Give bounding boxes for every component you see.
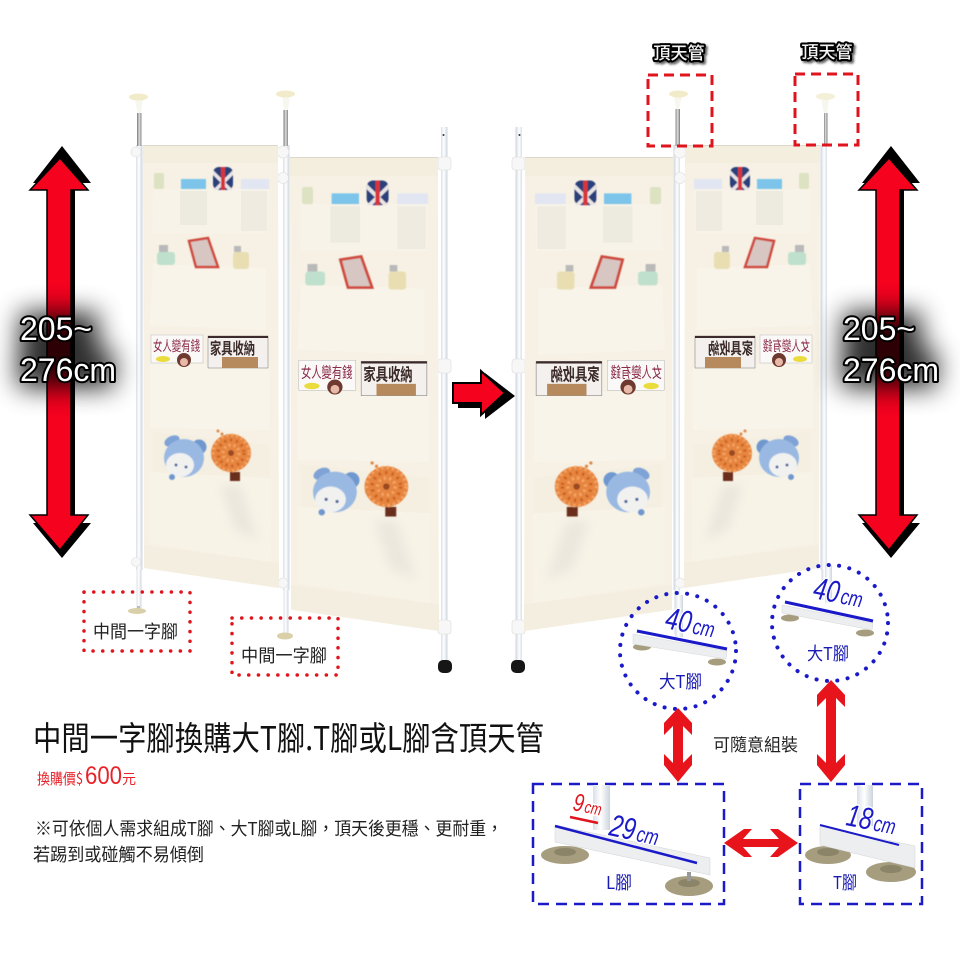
- vertical double arrow left: [664, 708, 692, 782]
- left height label with dark glow: 276cm: [20, 352, 116, 388]
- description text: [33, 815, 503, 867]
- right panel 2: fabric organizer (mirrored): [524, 157, 673, 631]
- magazines: 家具收納: [708, 335, 753, 359]
- pocket items row 1: [302, 181, 428, 205]
- large T foot circle right: 大T腳: [807, 640, 849, 666]
- left panel 1: fabric organizer: [143, 145, 279, 588]
- assembly note: 可隨意組裝: [713, 732, 798, 757]
- middle foot callout 1: 中間一字腳: [93, 618, 178, 644]
- large T foot circle right: 40cm: [811, 570, 867, 614]
- left rack frame poles: [128, 90, 452, 673]
- pocket items row 1: [694, 167, 809, 190]
- right height label with dark glow: 276cm: [843, 352, 939, 388]
- right height arrow: [859, 146, 920, 558]
- pocket items row 2: [714, 238, 806, 269]
- top-support box and label left: [648, 39, 712, 146]
- middle foot callout 1: [84, 592, 190, 651]
- pocket items row 2: [305, 257, 406, 290]
- left height label with dark glow: 205~: [20, 311, 92, 347]
- L foot box: L腳: [606, 869, 632, 895]
- magazines: 女人變有錢: [763, 336, 810, 356]
- magazines: [536, 360, 664, 396]
- left height label with dark glow: [18, 311, 116, 388]
- magazines: 家具收納: [363, 361, 413, 386]
- orange flowers: [211, 430, 251, 481]
- T foot box: 18cm: [844, 797, 900, 841]
- top-support box and label right: [795, 38, 858, 145]
- plush mouse: [312, 465, 360, 515]
- plush mouse: [163, 433, 206, 480]
- large T foot circle right: [772, 565, 888, 681]
- right height label with dark glow: [841, 311, 939, 388]
- price line: [37, 762, 136, 790]
- price line: 600: [85, 762, 122, 790]
- magazines: [695, 335, 812, 368]
- orange flowers: [364, 461, 408, 517]
- L foot box: 9cm: [571, 788, 605, 821]
- T foot box: [800, 784, 922, 904]
- top-support box and label right: 頂天管: [802, 38, 852, 63]
- magazines: 家具收納: [550, 361, 600, 386]
- magazines: 女人變有錢: [153, 336, 200, 356]
- description text: 若踢到或碰觸不易傾倒: [33, 841, 204, 867]
- large T foot circle left: 40cm: [663, 600, 719, 644]
- magazines: [299, 360, 427, 396]
- magazines: [151, 335, 268, 368]
- price line: 換購價$: [37, 768, 83, 789]
- L foot box: 29cm: [606, 807, 663, 852]
- right panel 1: fabric organizer (mirrored): [684, 145, 820, 588]
- orange flowers: [555, 461, 599, 517]
- horizontal double arrow: [724, 829, 798, 857]
- magazines: 女人變有錢: [611, 361, 662, 382]
- magazines: 家具收納: [210, 335, 255, 359]
- T foot box: T腳: [833, 869, 857, 895]
- middle foot callout 2: [232, 618, 338, 675]
- center arrow: [453, 371, 515, 419]
- middle foot callout 2: 中間一字腳: [241, 642, 327, 668]
- top-support box and label left: 頂天管: [654, 39, 704, 64]
- L foot box: [533, 784, 724, 904]
- right height label with dark glow: 205~: [843, 311, 915, 347]
- orange flowers: [712, 430, 752, 481]
- right rack frame poles (mirrored): [511, 90, 835, 673]
- large T foot circle left: 大T腳: [659, 668, 702, 694]
- pocket items row 1: [535, 181, 661, 205]
- title: 中間一字腳換購大T腳.T腳或L腳含頂天管: [33, 712, 544, 760]
- pocket items row 2: [157, 238, 249, 269]
- vertical double arrow right: [817, 680, 845, 782]
- price line: 元: [122, 769, 136, 789]
- plush mouse: [603, 465, 651, 515]
- pocket items row 1: [154, 167, 269, 190]
- plush mouse: [756, 433, 800, 480]
- left panel 2: fabric organizer: [290, 157, 439, 631]
- description text: ※可依個人需求組成T腳、大T腳或L腳，頂天後更穩、更耐重，: [35, 815, 503, 841]
- magazines: 女人變有錢: [301, 361, 352, 382]
- pocket items row 2: [557, 257, 658, 290]
- left height arrow: [30, 146, 91, 558]
- large T foot circle left: [620, 593, 736, 709]
